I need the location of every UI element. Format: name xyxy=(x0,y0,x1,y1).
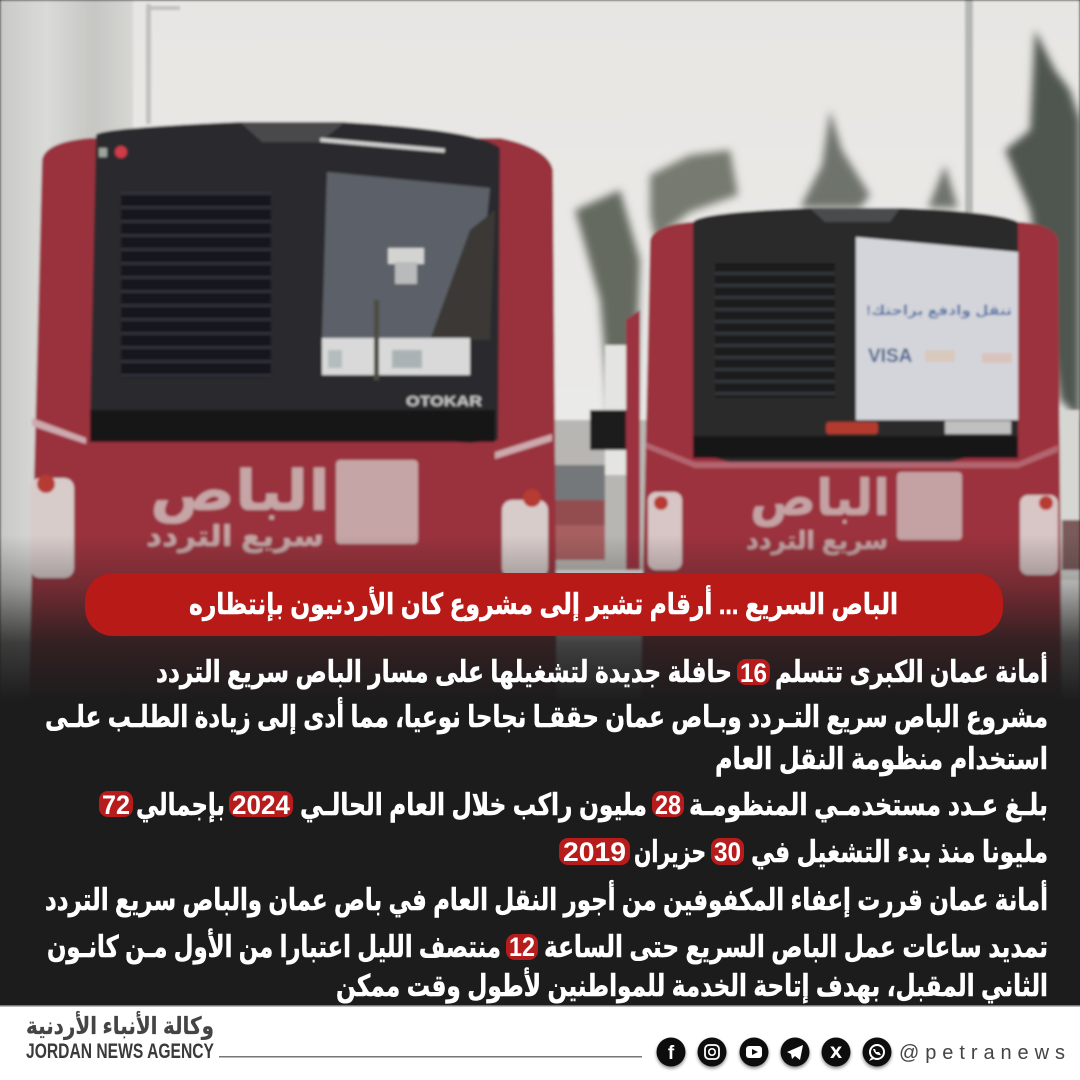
title banner xyxy=(85,573,1003,636)
bullet text: extended hours xyxy=(47,928,1048,1004)
bullet text: passenger numbers: 2019 xyxy=(563,837,626,867)
footer xyxy=(0,1005,1080,1080)
social icons xyxy=(656,1038,892,1066)
bullet text: extended hours: 12 xyxy=(509,932,535,962)
background photo: two red buses: الباص xyxy=(750,470,890,527)
bullet text: passenger numbers: 72 xyxy=(102,790,130,820)
bullet text: passenger numbers: 28 xyxy=(655,790,681,820)
background photo: two red buses: VISA xyxy=(868,346,913,367)
background photo: two red buses: سريع التردد xyxy=(146,521,324,553)
highlight pills for numbers xyxy=(99,659,770,960)
bullet text: passenger numbers: حزيران xyxy=(634,836,706,869)
background photo: two red buses: تنقل وادفع براحتك! xyxy=(866,302,1012,319)
bullet text: passenger numbers: 2024 xyxy=(232,790,290,820)
background photo: two red buses xyxy=(0,0,1080,720)
dark fade over photo xyxy=(0,535,1080,701)
bullet text: passenger numbers: بإجمالي xyxy=(136,789,225,823)
bullet text: buses delivered: حافلة جديدة لتشغيلها على مسار الباص سريع التردد xyxy=(156,656,732,689)
social icons: f xyxy=(668,1043,675,1064)
background photo: two red buses: OTOKAR xyxy=(406,393,482,410)
agency name arabic: وكالة الأنباء الأردنية xyxy=(26,1011,214,1040)
background photo: two red buses: سريع التردد xyxy=(746,527,888,556)
social handle: @petranews xyxy=(899,1042,1065,1064)
bullet text: passenger numbers: 30 xyxy=(714,837,741,867)
bus 2 xyxy=(626,310,640,570)
agency name english: JORDAN NEWS AGENCY xyxy=(26,1040,214,1063)
social icons: X xyxy=(830,1043,843,1062)
background photo: two red buses: الباص xyxy=(150,459,330,524)
bullet text: passenger numbers xyxy=(102,789,1048,870)
bullet text: extended hours: منتصف الليل اعتبارا من الأول مـن كانـون xyxy=(47,928,501,965)
bullet text: project success xyxy=(45,697,1048,777)
bus 1 xyxy=(28,138,557,720)
title banner: الباص السريع ... أرقام تشير إلى مشروع كان الأردنيون بإنتظاره xyxy=(189,585,898,622)
bullet text: passenger numbers: مليون راكب خلال العام الحالـي xyxy=(300,789,647,823)
bullet text: buses delivered: 16 xyxy=(740,658,767,688)
